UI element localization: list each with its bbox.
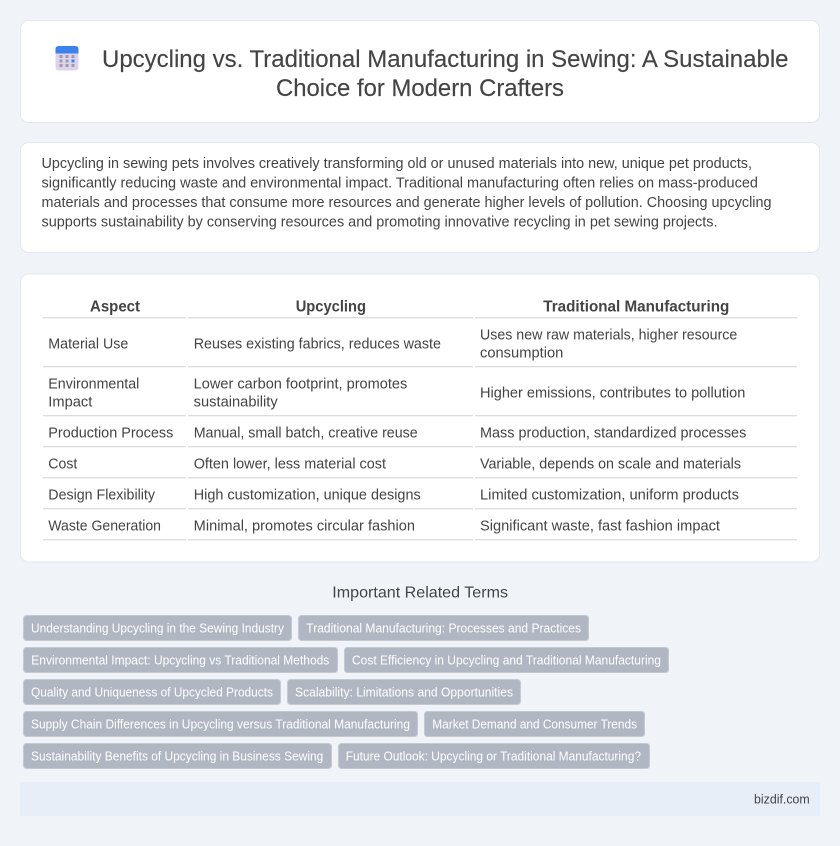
row: environmental impact: Impact xyxy=(48,394,92,410)
row: cost: Often lower, less material cost xyxy=(194,456,386,472)
text block: introduction paragraph: Upcycling in sewing pets involves creatively transforming old or unused materials into new, unique pet products, xyxy=(42,156,752,172)
panel: comparison table xyxy=(20,274,820,562)
chip xyxy=(288,680,520,704)
row: design flexibility: Design Flexibility xyxy=(48,487,156,503)
text block: introduction paragraph: materials and processes that consume more resources and generate higher levels of pollution. Choosing upcycling xyxy=(42,195,772,211)
row: waste generation: Minimal, promotes circular fashion xyxy=(194,518,415,534)
chip: Cost Efficiency in Upcycling and Traditional Manufacturing xyxy=(352,653,661,667)
chip xyxy=(24,648,338,672)
row: environmental impact: sustainability xyxy=(194,394,278,410)
chip: Environmental Impact: Upcycling vs Traditional Methods xyxy=(31,653,329,667)
row: production process: Manual, small batch, creative reuse xyxy=(194,425,418,441)
row: environmental impact: Higher emissions, contributes to pollution xyxy=(480,385,745,401)
row: environmental impact: Lower carbon footprint, promotes xyxy=(194,376,407,392)
table header row: Upcycling xyxy=(296,299,366,316)
row: cost: Cost xyxy=(48,456,77,472)
chip xyxy=(344,648,668,672)
chip: Understanding Upcycling in the Sewing Industry xyxy=(31,621,285,635)
row: environmental impact xyxy=(48,376,745,410)
chip xyxy=(24,616,292,640)
chip: Supply Chain Differences in Upcycling versus Traditional Manufacturing xyxy=(31,717,410,731)
chip xyxy=(24,712,418,736)
row: production process xyxy=(48,425,746,441)
chip xyxy=(338,744,650,768)
row: material use: Material Use xyxy=(48,336,128,352)
row: waste generation: Significant waste, fast fashion impact xyxy=(480,518,720,534)
row: production process: Mass production, standardized processes xyxy=(480,425,746,441)
panel: introduction xyxy=(20,142,820,252)
row: material use: consumption xyxy=(480,345,563,361)
table header row: Traditional Manufacturing xyxy=(543,299,729,316)
title xyxy=(102,46,788,102)
text block: introduction paragraph: supports sustainability by conserving resources and promoting innovative recycling in pet sewing projects. xyxy=(42,214,718,230)
row: material use: Uses new raw materials, higher resource xyxy=(480,327,737,343)
footer: bizdif.com xyxy=(754,792,810,806)
panel: related term chips xyxy=(24,616,668,768)
row: production process: Production Process xyxy=(48,425,173,441)
text block: introduction paragraph xyxy=(42,156,772,230)
title: Upcycling vs. Traditional Manufacturing in Sewing: A Sustainable xyxy=(102,46,788,73)
chip xyxy=(24,744,332,768)
row: design flexibility xyxy=(48,487,739,503)
table header row xyxy=(90,299,729,316)
chip: Traditional Manufacturing: Processes and Practices xyxy=(306,621,581,635)
chip: Quality and Uniqueness of Upcycled Products xyxy=(31,685,273,699)
text block: introduction paragraph: significantly reducing waste and environmental impact. Traditional manufacturing often relies on mass-produced xyxy=(42,176,758,192)
row: material use: Reuses existing fabrics, reduces waste xyxy=(194,336,441,352)
row: environmental impact: Environmental xyxy=(48,376,139,392)
chip xyxy=(298,616,588,640)
chip: Market Demand and Consumer Trends xyxy=(432,717,637,731)
chip: Sustainability Benefits of Upcycling in Business Sewing xyxy=(31,749,323,763)
row: cost xyxy=(48,456,741,472)
icon: calendar xyxy=(56,46,78,70)
panel: title header xyxy=(20,20,820,122)
footer xyxy=(20,782,820,816)
row: material use xyxy=(48,327,737,361)
row: waste generation: Waste Generation xyxy=(48,518,161,534)
title: Choice for Modern Crafters xyxy=(276,75,564,102)
chip xyxy=(24,680,280,704)
row: design flexibility: Limited customization, uniform products xyxy=(480,487,739,503)
row: cost: Variable, depends on scale and materials xyxy=(480,456,741,472)
table header row: Aspect xyxy=(90,299,140,316)
chip: Scalability: Limitations and Opportunities xyxy=(295,685,513,699)
row: design flexibility: High customization, unique designs xyxy=(194,487,421,503)
row: waste generation xyxy=(48,518,720,534)
chip xyxy=(424,712,644,736)
chip: Future Outlook: Upcycling or Traditional Manufacturing? xyxy=(346,749,641,763)
heading: important related terms: Important Related Terms xyxy=(332,585,508,602)
